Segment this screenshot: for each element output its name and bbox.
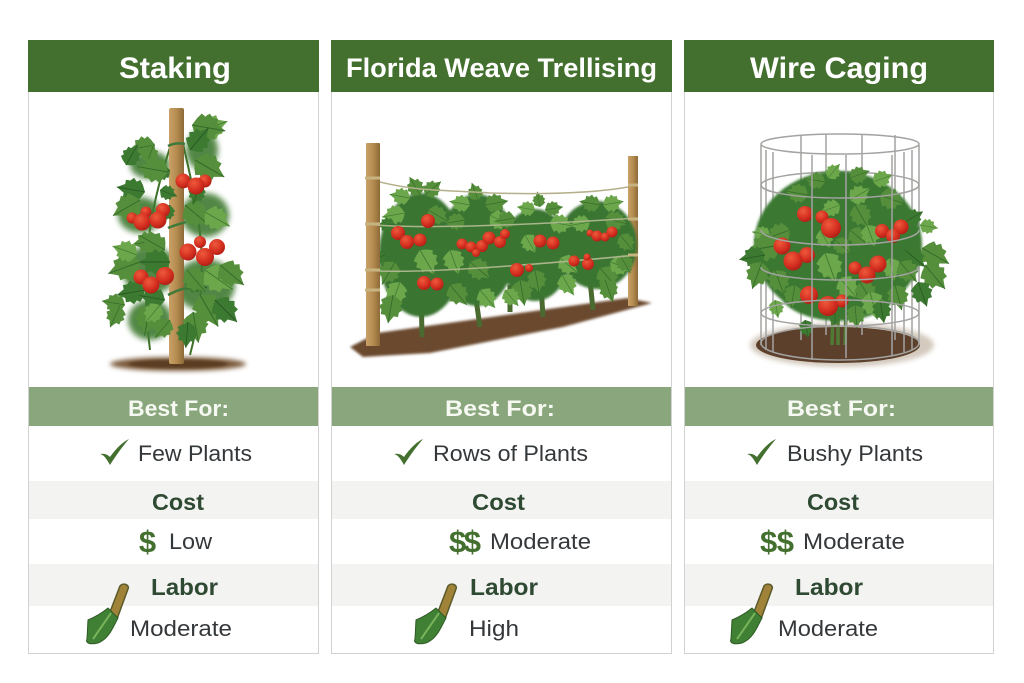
panel: Wire Caging (684, 40, 994, 654)
band: Labor (29, 564, 318, 606)
illustration: trellised row of tomato plants (350, 143, 652, 357)
row: Few Plants: Few Plants (138, 441, 252, 466)
band: Best For: Best For: (445, 396, 555, 421)
band: Cost (685, 481, 993, 519)
row: High labor: High (469, 616, 519, 641)
heading: Wire Caging (684, 40, 994, 92)
band: Best For: Best For: (128, 396, 229, 421)
band: Cost (332, 481, 671, 519)
row: Low cost: Low (169, 529, 212, 554)
row: Moderate cost: $$ (449, 524, 481, 559)
row: Moderate cost: Moderate (490, 529, 591, 554)
row: Moderate labor (87, 584, 232, 644)
band: Best For (332, 387, 671, 426)
band: Cost: Cost (472, 489, 525, 515)
row: Moderate cost (449, 524, 591, 559)
row: Moderate labor: Moderate (130, 616, 232, 641)
row: Rows of Plants: Rows of Plants (433, 441, 588, 466)
band: Best For (685, 387, 993, 426)
band: Labor: Labor (795, 574, 863, 600)
row: Low cost (139, 524, 212, 559)
heading: Staking: Staking (119, 52, 231, 85)
row: Bushy Plants: Bushy Plants (787, 441, 923, 466)
panel: Staking (28, 40, 319, 654)
row: Bushy Plants (747, 439, 923, 466)
illustration: caged tomato plant (737, 134, 956, 367)
band: Cost: Cost (807, 489, 859, 515)
row: High labor (415, 584, 519, 644)
band: Cost: Cost (152, 489, 204, 515)
band: Cost (29, 481, 318, 519)
row: Low cost: $ (139, 524, 156, 559)
band: Best For (29, 387, 318, 426)
illustration: staked tomato plant (100, 108, 252, 371)
heading: Florida Weave Trellising: Florida Weave Trellising (346, 53, 657, 83)
row: Moderate cost: $$ (760, 524, 794, 559)
band: Best For: Best For: (787, 396, 896, 421)
band: Labor: Labor (151, 574, 218, 600)
heading: Florida Weave Trellising (331, 40, 672, 92)
row: Few Plants (100, 439, 252, 466)
heading: Wire Caging: Wire Caging (750, 52, 928, 85)
panel: Florida Weave Trellising (331, 40, 672, 654)
heading: Staking (28, 40, 319, 92)
row: Moderate labor (731, 584, 878, 644)
row: Moderate cost (760, 524, 905, 559)
band: Labor (685, 564, 993, 606)
row: Moderate cost: Moderate (803, 529, 905, 554)
band: Labor (332, 564, 671, 606)
band: Labor: Labor (470, 574, 538, 600)
row: Moderate labor: Moderate (778, 616, 878, 641)
